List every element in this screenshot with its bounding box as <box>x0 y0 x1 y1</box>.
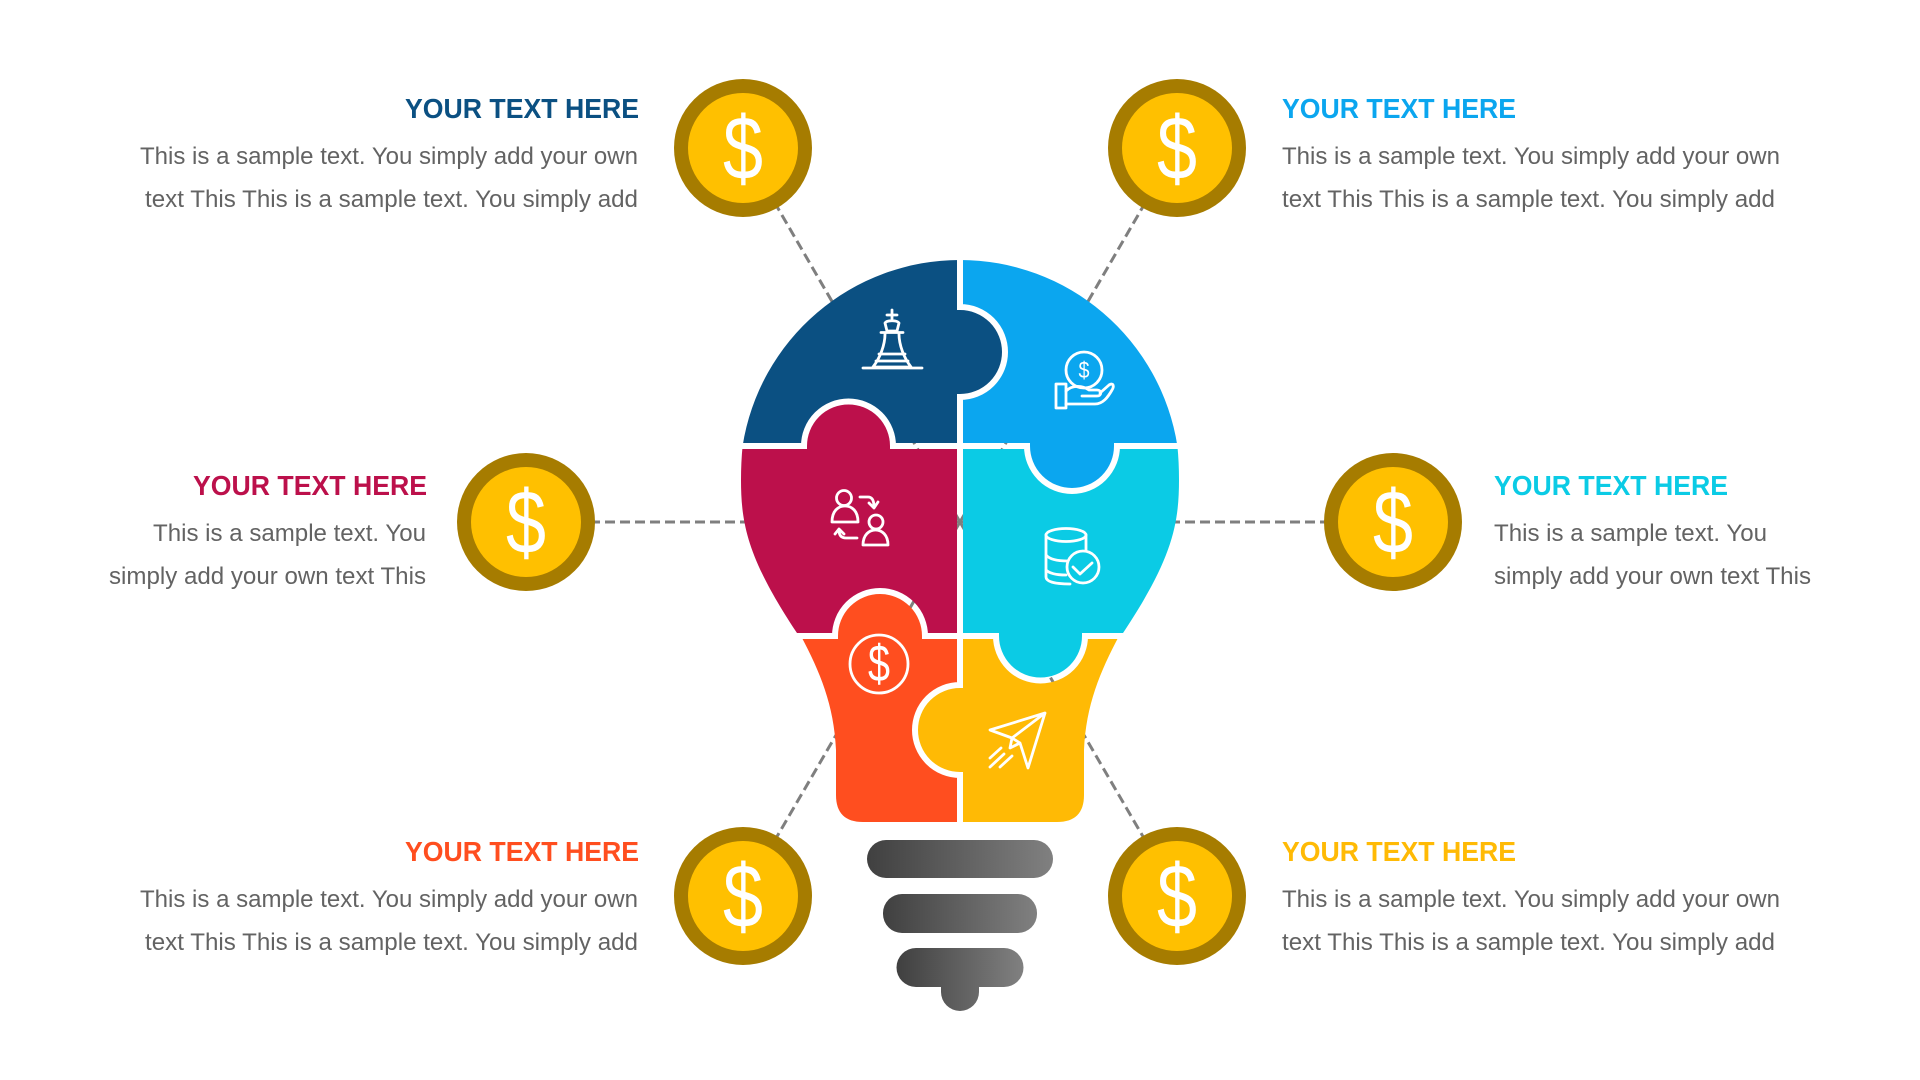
coin: $ <box>1157 847 1197 947</box>
coin: $ <box>723 847 763 947</box>
coin <box>457 453 595 591</box>
piece: navy <box>743 260 1005 446</box>
coin: $ <box>1157 99 1197 199</box>
coin <box>1324 453 1462 591</box>
coin: $ <box>506 473 546 573</box>
body text <box>109 520 426 590</box>
body text: text This This is a sample text. You simply add <box>1282 929 1775 956</box>
coin <box>674 79 812 217</box>
heading: YOUR TEXT HERE <box>193 470 427 501</box>
heading: YOUR TEXT HERE <box>405 93 639 124</box>
body text <box>1282 143 1780 213</box>
base bar 3 with stem <box>897 948 1024 1011</box>
icon: chess king <box>863 310 922 368</box>
piece: orange <box>801 591 960 822</box>
piece: crimson <box>741 402 960 636</box>
body text: text This This is a sample text. You simply add <box>145 929 638 956</box>
heading: YOUR TEXT HERE <box>1282 836 1516 867</box>
icon: dollar circle: $ <box>868 635 890 693</box>
callout: top right <box>1108 79 1780 217</box>
body text <box>140 886 638 956</box>
icon: people exchange <box>832 490 888 545</box>
puzzle light bulb <box>741 260 1179 822</box>
icon: database check <box>1046 528 1099 584</box>
body text: This is a sample text. You simply add your own <box>1282 143 1780 170</box>
body text: This is a sample text. You <box>1494 520 1767 547</box>
body text: This is a sample text. You simply add your own <box>140 143 638 170</box>
heading: YOUR TEXT HERE <box>405 836 639 867</box>
heading: YOUR TEXT HERE <box>1282 93 1516 124</box>
connector lines <box>526 148 1393 895</box>
coin: $ <box>1373 473 1413 573</box>
coin <box>1108 827 1246 965</box>
heading: YOUR TEXT HERE <box>1494 470 1728 501</box>
piece: cyan <box>960 446 1179 680</box>
callout: bottom left <box>140 827 812 965</box>
body text: text This This is a sample text. You simply add <box>145 186 638 213</box>
body text <box>1494 520 1811 590</box>
coin <box>674 827 812 965</box>
body text: text This This is a sample text. You simply add <box>1282 186 1775 213</box>
callout: top left <box>140 79 812 217</box>
body text: simply add your own text This <box>1494 563 1811 590</box>
body text: simply add your own text This <box>109 563 426 590</box>
body text <box>1282 886 1780 956</box>
body text <box>140 143 638 213</box>
piece: yellow <box>915 636 1119 822</box>
coin: $ <box>723 99 763 199</box>
icon: hand with coin <box>1056 352 1113 408</box>
callout: middle right <box>1324 453 1811 591</box>
bulb base <box>867 840 1053 1011</box>
icon: hand with coin: $ <box>1078 357 1090 383</box>
body text: This is a sample text. You <box>153 520 426 547</box>
base bar 1 <box>867 840 1053 878</box>
piece: blue <box>960 260 1177 491</box>
callout: bottom right <box>1108 827 1780 965</box>
base bar 2 <box>883 894 1037 933</box>
body text: This is a sample text. You simply add your own <box>140 886 638 913</box>
icon: paper plane <box>990 713 1045 768</box>
icon: dollar circle <box>850 635 908 693</box>
callout: middle left <box>109 453 595 591</box>
coin <box>1108 79 1246 217</box>
body text: This is a sample text. You simply add your own <box>1282 886 1780 913</box>
